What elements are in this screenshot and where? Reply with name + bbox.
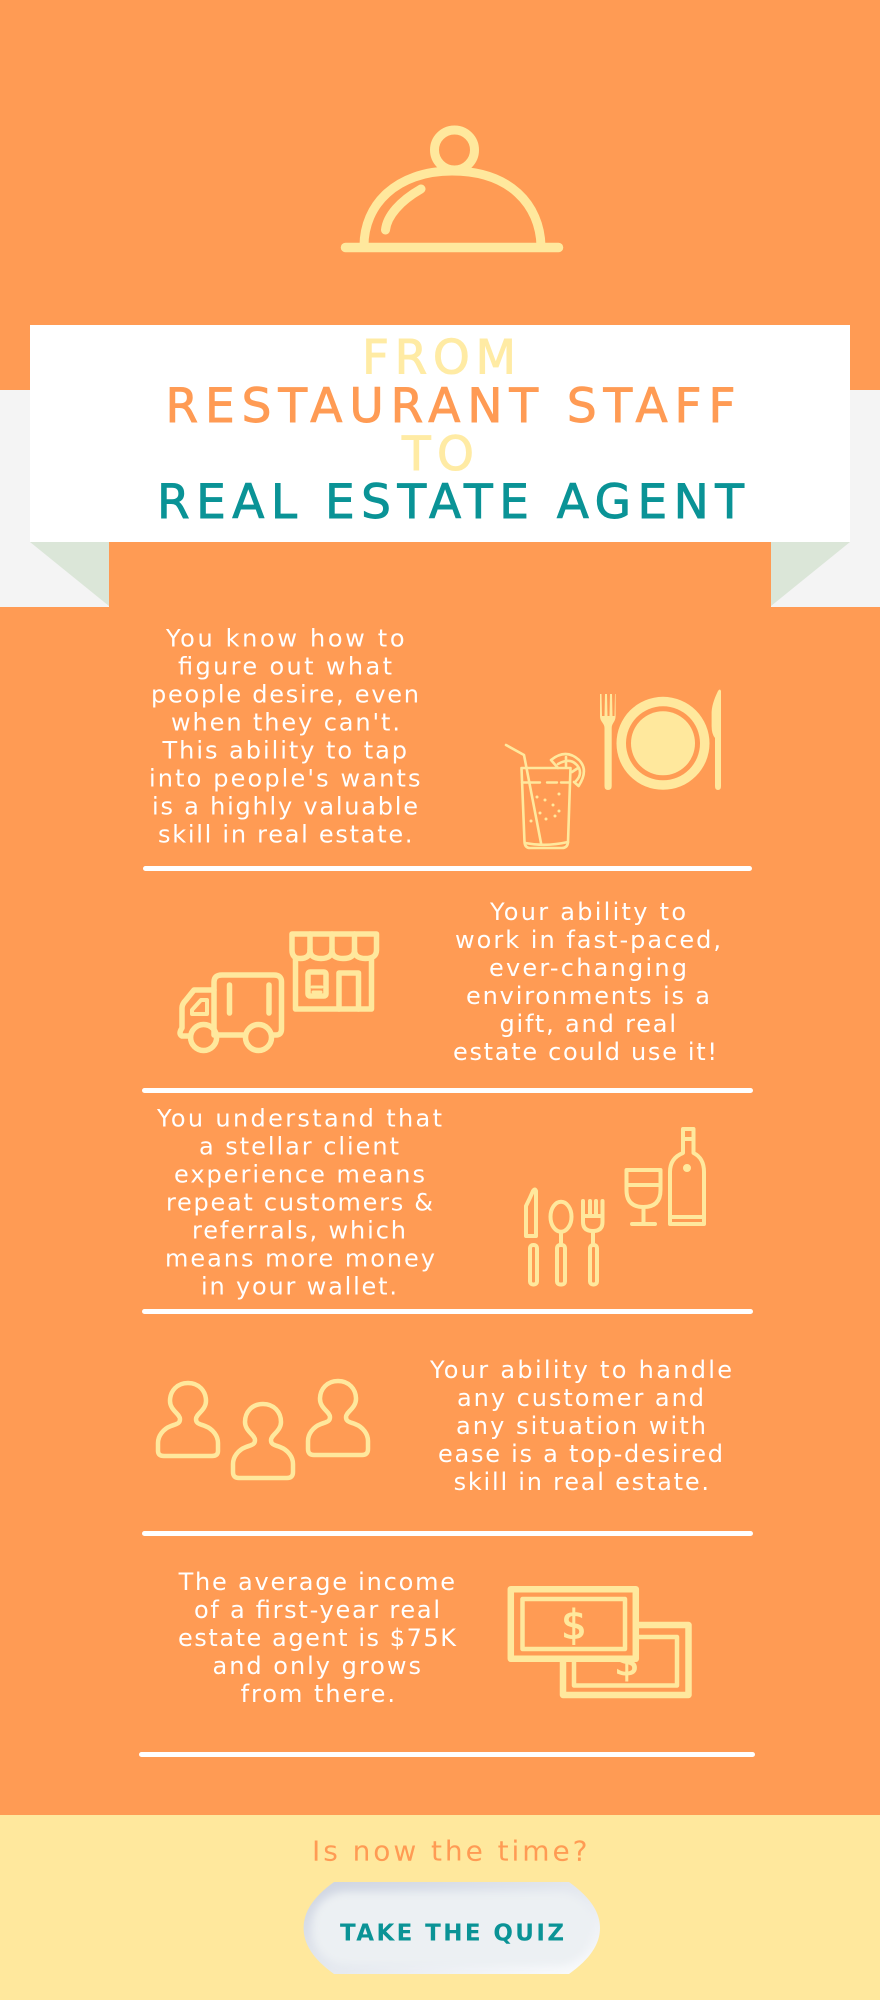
- text block: client experience: a stellar client: [199, 1133, 399, 1161]
- icon: delivery truck and storefront: [180, 934, 376, 1050]
- footer question: Is now the time?: [312, 1835, 588, 1868]
- footer band: [0, 1815, 880, 2000]
- button: take the quiz: TAKE THE QUIZ: [340, 1921, 564, 1947]
- text block: fast-paced environments: work in fast-paced,: [455, 926, 721, 954]
- text block: average income: and only grows: [212, 1652, 421, 1680]
- icon: plate, fork, knife and drink: [506, 690, 721, 848]
- text block: fast-paced environments: [453, 898, 721, 1066]
- text block: handling any situation: Your ability to handle: [429, 1356, 732, 1384]
- icon: three people: [158, 1381, 368, 1478]
- text block: handling any situation: [429, 1356, 732, 1496]
- text block: average income: The average income: [178, 1568, 455, 1596]
- text block: client experience: You understand that: [156, 1105, 442, 1133]
- text block: tapping into wants: figure out what: [178, 653, 392, 681]
- text block: tapping into wants: You know how to: [165, 625, 404, 653]
- icon: serving cloche: [346, 130, 558, 248]
- title banner: [30, 325, 850, 542]
- text block: handling any situation: skill in real estate.: [454, 1468, 709, 1496]
- text block: client experience: repeat customers &: [166, 1189, 433, 1217]
- text block: average income: estate agent is $75K: [178, 1624, 457, 1652]
- icon: money bills: [511, 1589, 688, 1695]
- divider: [139, 1752, 755, 1757]
- text block: client experience: referrals, which: [192, 1217, 406, 1245]
- divider: [142, 1088, 753, 1093]
- text block: client experience: experience means: [174, 1161, 425, 1189]
- text block: tapping into wants: is a highly valuable: [152, 793, 418, 821]
- text block: tapping into wants: This ability to tap: [162, 737, 407, 765]
- icon: money bills: $: [614, 1639, 640, 1685]
- text block: tapping into wants: people desire, even: [151, 681, 419, 709]
- divider: [142, 1309, 753, 1314]
- left ribbon fold: [30, 542, 109, 606]
- text block: tapping into wants: into people's wants: [149, 765, 420, 793]
- icon: money bills: $: [561, 1602, 587, 1648]
- text block: fast-paced environments: estate could use it!: [453, 1038, 717, 1066]
- title banner: RESTAURANT STAFF: [166, 379, 736, 434]
- text block: client experience: means more money: [165, 1245, 435, 1273]
- title banner: TO: [401, 427, 474, 482]
- text block: fast-paced environments: ever-changing: [489, 954, 687, 982]
- text block: client experience: in your wallet.: [201, 1273, 397, 1301]
- right ribbon fold: [771, 542, 850, 606]
- icon: cutlery, wine glass and bottle: [526, 1129, 704, 1284]
- text block: fast-paced environments: gift, and real: [500, 1010, 676, 1038]
- text block: average income: from there.: [241, 1680, 395, 1708]
- divider: [143, 866, 752, 871]
- title banner: FROM: [362, 331, 516, 386]
- text block: fast-paced environments: Your ability to: [489, 898, 686, 926]
- title banner: REAL ESTATE AGENT: [157, 475, 744, 530]
- text block: handling any situation: any customer and: [457, 1384, 704, 1412]
- text block: client experience: [156, 1105, 442, 1301]
- text block: handling any situation: ease is a top-desired: [438, 1440, 723, 1468]
- text block: fast-paced environments: environments is a: [466, 982, 710, 1010]
- text block: tapping into wants: skill in real estate.: [158, 821, 412, 849]
- text block: average income: [178, 1568, 457, 1708]
- text block: average income: of a first-year real: [194, 1596, 440, 1624]
- divider: [142, 1531, 753, 1536]
- button: take the quiz: [300, 1880, 604, 1976]
- text block: tapping into wants: [149, 625, 420, 849]
- text block: handling any situation: any situation with: [456, 1412, 706, 1440]
- text block: tapping into wants: when they can't.: [171, 709, 400, 737]
